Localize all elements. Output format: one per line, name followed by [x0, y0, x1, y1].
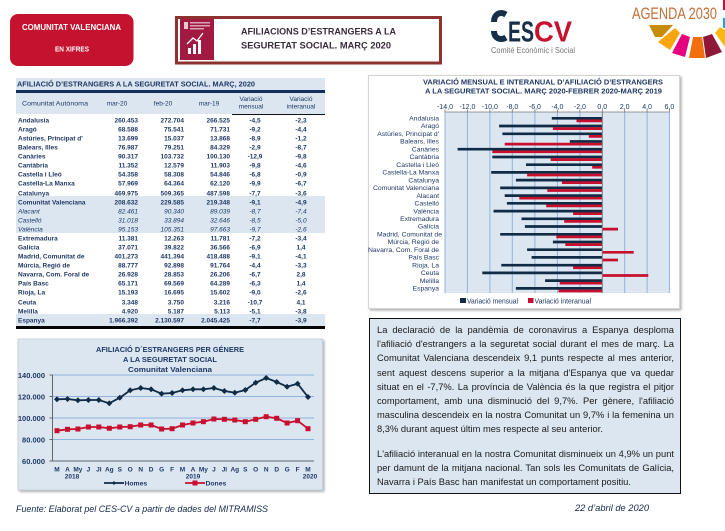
table rows: 71.731 — [210, 126, 230, 133]
table rows: 15.037 — [164, 135, 184, 142]
table rows: 97.663 — [210, 226, 230, 233]
table rows: 12.579 — [164, 162, 184, 169]
table header: mar-20 — [107, 100, 128, 108]
table rows: 11.781 — [210, 235, 230, 242]
x axis labels: Jl — [96, 466, 102, 474]
table rows: 441.394 — [160, 253, 184, 260]
table rows: Aragó — [18, 126, 37, 133]
x axis labels: M — [305, 466, 311, 474]
x axis labels: S — [243, 466, 248, 474]
table rows: 69.569 — [164, 280, 184, 287]
logo: CES CV: CV — [534, 16, 573, 48]
table rows: 64.289 — [210, 280, 230, 287]
x axis labels: O — [253, 466, 258, 474]
table rows: 487.598 — [206, 190, 230, 197]
category labels: Extremadura — [400, 216, 439, 223]
table rows: 509.365 — [160, 190, 184, 197]
y axis and gridlines — [18, 371, 314, 466]
x axis labels: G — [285, 466, 290, 474]
table rows: 11.352 — [118, 162, 138, 169]
x axis labels: My — [199, 466, 208, 474]
highlight: Comunitat Valenciana block — [16, 196, 325, 233]
table rows: -2,6 — [295, 226, 307, 233]
table rows: Castella i Lleó — [18, 171, 62, 178]
table rows: 26.928 — [118, 271, 138, 278]
title text — [241, 26, 396, 50]
table rows: -0,9 — [295, 171, 307, 178]
bars: variació mensual — [458, 118, 602, 288]
category labels: Catalunya — [408, 177, 439, 184]
table rows: 75.541 — [164, 126, 184, 133]
table rows: -2,3 — [295, 117, 307, 124]
category labels: Canàries — [412, 146, 440, 153]
logo: Agenda 2030 — [632, 0, 725, 58]
table rows: 33.894 — [164, 217, 184, 224]
text block: analysis: l'afiliació d'estrangers a la seguretat social durant el mes de març. La — [377, 339, 674, 349]
x axis labels: D — [274, 466, 279, 474]
table rows: -7,4 — [295, 208, 307, 215]
top axis labels: -14,0 — [437, 104, 453, 111]
x axis labels: O — [128, 466, 133, 474]
table rows: -3,6 — [295, 190, 307, 197]
legend: Variació mensual — [467, 298, 518, 306]
table rows: -3,8 — [295, 308, 307, 315]
table rows: -4,5 — [249, 117, 261, 124]
table header: feb-20 — [154, 100, 173, 108]
table rows: Comunitat Valenciana — [18, 199, 86, 206]
zero axis — [601, 112, 603, 293]
table rows: Rioja, La — [18, 289, 45, 296]
table rows: -3,9 — [295, 317, 307, 324]
top axis labels: -6,0 — [529, 104, 541, 111]
logo: CES CV: Comité Econòmic i Social — [491, 46, 575, 55]
table rows: Madrid, Comunitat de — [18, 253, 85, 260]
x axis labels: Ag — [105, 466, 114, 474]
category labels: Aragó — [421, 123, 439, 130]
table rows: 68.588 — [118, 126, 138, 133]
text block: analysis: situat en el -7,7%. La província de València és la que registra el pitjor — [377, 382, 674, 392]
table rows: -8,7 — [249, 208, 261, 215]
table rows: 31.018 — [118, 217, 138, 224]
table rows: Andalusia — [18, 117, 49, 124]
table header: interanual — [287, 104, 316, 110]
table header: mensual — [239, 104, 264, 110]
x axis labels: S — [118, 466, 123, 474]
category labels — [368, 116, 442, 293]
table rows: 11.381 — [118, 235, 138, 242]
table rows: 1.966.392 — [109, 317, 138, 324]
table rows: -12,9 — [248, 153, 263, 160]
table rows: 103.732 — [160, 153, 184, 160]
table rows: València — [18, 226, 43, 233]
top axis labels — [437, 104, 674, 111]
y axis and gridlines: 80.000 — [22, 436, 45, 444]
table rows: 3.750 — [168, 299, 184, 306]
table rows: Múrcia, Regió de — [18, 262, 70, 269]
table rows: -3,3 — [295, 262, 307, 269]
table rows: 88.777 — [118, 262, 138, 269]
table rows: Castelló — [18, 217, 42, 224]
table rows: Alacant — [17, 208, 41, 215]
category labels: Comunitat Valenciana — [373, 185, 439, 192]
chart title: AFILIACIÓ D´ESTRANGERS PER GÉNERE — [96, 345, 244, 354]
panel: bar chart monthly and annual variation — [368, 76, 680, 308]
table rows: 84.329 — [210, 144, 230, 151]
table rows: -5,0 — [295, 217, 307, 224]
table rows: Extremadura — [18, 235, 58, 242]
badge: Comunitat Valenciana en xifres: COMUNITAT VALENCIANA — [22, 23, 121, 32]
table rows: 65.171 — [118, 280, 138, 287]
category labels: Castelló — [414, 200, 439, 208]
table rows: 15.193 — [118, 289, 138, 296]
table header: Comunitat Autònoma — [22, 100, 88, 108]
table rows: 90.340 — [164, 208, 184, 215]
category labels: País Basc — [408, 255, 440, 262]
table rows: -10,7 — [248, 299, 263, 306]
chart title — [96, 345, 244, 374]
table rows: 100.130 — [206, 153, 230, 160]
table rows: -6,7 — [295, 180, 307, 187]
x axis labels: 2019 — [186, 474, 201, 480]
y axis and gridlines: 140.000 — [18, 371, 45, 380]
badge: Comunitat Valenciana en xifres: EN XIFRES — [55, 46, 89, 54]
x axis labels: G — [159, 466, 164, 474]
table rows: 105.351 — [160, 226, 184, 233]
category labels: Cantàbria — [410, 154, 439, 161]
category labels: Castella i Lleó — [396, 162, 439, 169]
table rows: 13.868 — [210, 135, 230, 142]
table rows: Espanya — [18, 317, 45, 324]
table rows: 12.263 — [164, 235, 184, 242]
table rows: 16.695 — [164, 289, 184, 296]
table rows: 229.585 — [160, 199, 184, 206]
text block: analysis: La declaració de la pandèmia de coronavirus a Espanya desploma — [377, 325, 674, 335]
category labels: Castella-La Manxa — [382, 170, 439, 177]
table rows: -4,9 — [295, 199, 307, 206]
table rows: 79.251 — [164, 144, 184, 151]
table rows: 1,4 — [296, 244, 306, 251]
logo: CES CV: ES — [508, 16, 534, 48]
x axis labels: F — [296, 466, 300, 474]
table rows: Melilla — [18, 308, 38, 315]
x axis labels: F — [170, 466, 174, 474]
text block: analysis: masculina descendeix en la nostra Comunitat un 9,7% i la femenina un — [377, 410, 674, 420]
category labels: Galícia — [418, 224, 439, 231]
title text: SEGURETAT SOCIAL. MARÇ 2020 — [241, 40, 391, 50]
text block: analysis: sent aquest descens superior a la mitjana d'Espanya que va quedar — [377, 368, 674, 378]
table header: Variació — [239, 96, 263, 103]
table rows: -9,0 — [249, 289, 261, 296]
table rows: -9,8 — [249, 162, 261, 169]
plot background and gridlines — [445, 110, 669, 293]
chart title: A LA SEGURETAT SOCIAL. MARÇ 2020-FEBRER 2020-MARÇ 2019 — [425, 86, 662, 96]
table header: mar-19 — [199, 100, 220, 108]
table rows: 13.699 — [118, 135, 138, 142]
table rows: 3.348 — [122, 299, 138, 306]
category labels: Andalusia — [409, 116, 439, 122]
x axis labels — [54, 466, 318, 480]
x axis labels: Ag — [230, 466, 239, 474]
table rows: País Basc — [18, 280, 49, 287]
table rows: 272.704 — [160, 117, 184, 124]
text block: analysis: Navarra i País Basc han manifestat un comportament positiu. — [377, 477, 631, 487]
date: 22 d’abril de 2020 — [574, 503, 649, 513]
badge: Comunitat Valenciana en xifres — [10, 14, 134, 66]
table rows: -4,4 — [249, 262, 261, 269]
table rows: -9,8 — [295, 153, 307, 160]
table rows: 15.602 — [210, 289, 230, 296]
text block: analysis — [369, 318, 681, 494]
table rows: 11.903 — [210, 162, 230, 169]
category labels: Navarra, Com. Foral de — [368, 247, 439, 254]
chart title: A LA SEGURETAT SOCIAL — [123, 355, 217, 364]
table rows: Cantàbria — [18, 162, 48, 169]
table rows: -9,1 — [249, 253, 261, 260]
highlight: Espanya block — [16, 314, 325, 326]
legend: Homes — [124, 480, 147, 488]
text block: analysis: Comunitat Valenciana descendeix 9,1 punts respecte al mes anterior, — [377, 353, 674, 363]
table rows: 58.308 — [164, 171, 184, 178]
table header: Variació — [289, 96, 313, 103]
table rows: Canàries — [18, 153, 46, 160]
table rows: 219.348 — [206, 199, 230, 206]
table rows: 4.920 — [122, 308, 138, 315]
table rows: 37.071 — [118, 244, 138, 251]
x axis labels: N — [264, 466, 269, 474]
table rows: 95.153 — [118, 226, 138, 233]
panel: line chart by gender — [18, 339, 322, 490]
table rows: 3.216 — [214, 299, 230, 306]
x axis labels: 2020 — [303, 474, 318, 480]
table rows: -4,6 — [295, 162, 307, 169]
table rows: 39.822 — [164, 244, 184, 251]
table rows: 418.488 — [206, 253, 230, 260]
y axis and gridlines: 60.000 — [22, 457, 45, 466]
text block: analysis: L'afiliació interanual en la nostra Comunitat disminueix un 4,9% un punt — [377, 449, 674, 459]
top axis labels: -8,0 — [506, 104, 518, 111]
top axis labels: 4,0 — [642, 104, 652, 111]
category labels: Múrcia, Regió de — [388, 239, 439, 246]
table rows: 76.987 — [118, 144, 138, 151]
category labels: Espanya — [413, 286, 439, 293]
table rows: Navarra, Com. Foral de — [18, 271, 90, 278]
legend: Variació interanual — [534, 298, 591, 306]
top axis labels: -4,0 — [551, 104, 564, 111]
table rows: 26.206 — [210, 271, 230, 278]
line: Homes — [57, 378, 308, 403]
table rows: -5,1 — [249, 308, 261, 315]
y axis and gridlines: 120.000 — [18, 392, 45, 402]
x axis labels: 2018 — [65, 474, 80, 480]
table closing bar — [16, 326, 325, 329]
table rows: -4,4 — [295, 126, 307, 133]
table rows: 5.187 — [168, 308, 184, 315]
table rows: 89.039 — [210, 208, 230, 215]
top axis labels: 2,0 — [620, 104, 630, 111]
panel: table of affiliations — [16, 78, 325, 329]
line: Dones — [57, 417, 308, 431]
chart title — [423, 78, 663, 96]
table rows: 62.120 — [210, 180, 230, 187]
table rows: 4,1 — [296, 299, 306, 306]
table rows: 2.130.597 — [155, 317, 184, 324]
table rows: Astúries, Principat d' — [18, 135, 83, 142]
text block: analysis: 8,3% durant aquest últim mes respecte al seu anterior. — [377, 424, 603, 434]
table rows: -7,7 — [249, 317, 261, 324]
category labels: Astúries, Principat d' — [377, 131, 439, 138]
y axis and gridlines: 100.000 — [18, 414, 45, 423]
table rows: 82.461 — [118, 208, 138, 215]
bars: variació interanual — [492, 121, 648, 291]
x axis labels: J — [212, 466, 216, 474]
table rows: 208.632 — [114, 199, 138, 206]
x axis labels: A — [65, 466, 70, 474]
table title — [16, 78, 325, 90]
icon: SDG 8 decent work — [180, 19, 214, 60]
table rows: -6,9 — [249, 244, 261, 251]
table rows: -7,2 — [249, 235, 261, 242]
table rows: -8,5 — [249, 217, 261, 224]
table rows: 401.273 — [114, 253, 138, 260]
table rows: 54.358 — [118, 171, 138, 178]
table header — [16, 90, 325, 115]
legend — [104, 480, 226, 488]
table rows: 92.898 — [164, 262, 184, 269]
category labels: Ceuta — [421, 270, 439, 277]
top axis labels: 6,0 — [665, 104, 674, 111]
source note: Fuente: Elaborat pel CES-CV a partir de dades del MITRAMISS — [16, 504, 268, 514]
table rows: -7,7 — [249, 190, 261, 197]
table rows: Balears, Illes — [18, 144, 58, 151]
table rows: 90.317 — [118, 153, 138, 160]
category labels: Balears, Illes — [400, 139, 440, 146]
table title: AFILIACIÓ D’ESTRANGERS A LA SEGURETAT SOCIAL. MARÇ, 2020 — [17, 80, 255, 88]
legend: Dones — [206, 480, 226, 488]
title text: AFILIACIONS D’ESTRANGERS A LA — [241, 26, 396, 36]
x axis labels: My — [73, 466, 83, 474]
table rows: 54.846 — [210, 171, 230, 178]
table rows: -8,7 — [295, 144, 307, 151]
table rows: 64.364 — [164, 180, 184, 187]
table rows: Catalunya — [18, 190, 49, 197]
table rows: 1,4 — [296, 280, 306, 287]
table rows: -9,7 — [249, 226, 261, 233]
table rows: -9,9 — [249, 180, 261, 187]
table rows — [17, 117, 307, 324]
table rows: 91.764 — [210, 262, 230, 269]
table rows: -2,9 — [249, 144, 261, 151]
x axis labels: M — [180, 466, 185, 474]
table rows: 5.113 — [214, 308, 230, 315]
top axis labels: -2,0 — [574, 104, 586, 111]
logo: CES CV — [491, 13, 575, 55]
category labels: Melilla — [420, 278, 439, 285]
table rows: -9,2 — [249, 126, 261, 133]
table rows: 469.975 — [114, 190, 138, 197]
top axis labels: 0,0 — [597, 104, 607, 111]
table rows: -2,6 — [295, 289, 307, 296]
table rows: -6,8 — [249, 171, 261, 178]
table rows: -6,3 — [249, 280, 261, 287]
top axis labels: -10,0 — [482, 104, 498, 111]
table rows: 28.853 — [164, 271, 184, 278]
table rows: Ceuta — [18, 299, 36, 306]
table rows: 57.969 — [118, 180, 138, 187]
chart title: Comunitat Valenciana — [128, 365, 213, 374]
top axis labels: -12,0 — [459, 104, 475, 111]
table rows: -6,7 — [249, 271, 261, 278]
category labels: Alacant — [416, 193, 439, 200]
table rows: -3,4 — [295, 235, 307, 242]
title box — [176, 18, 440, 63]
x axis labels: J — [87, 466, 91, 474]
category labels: València — [413, 208, 439, 215]
chart title: VARIACIÓ MENSUAL E INTERANUAL D’AFILIACIÓ D’ESTRANGERS — [423, 78, 663, 86]
category labels: Rioja, La — [412, 262, 439, 269]
x axis labels: A — [191, 466, 196, 474]
x axis labels: D — [149, 466, 154, 474]
table rows: Castella-La Manxa — [18, 180, 75, 187]
x axis labels: M — [54, 466, 60, 474]
table rows: -1,2 — [295, 135, 307, 142]
table rows: 32.646 — [210, 217, 230, 224]
category labels: Madrid, Comunitat de — [377, 232, 442, 238]
table rows: -4,1 — [295, 253, 307, 260]
table rows: -9,1 — [249, 199, 261, 206]
table rows: 266.525 — [206, 117, 230, 124]
x axis labels: Jl — [222, 466, 227, 474]
legend — [460, 298, 591, 306]
text block: analysis: comportament, amb una disminució del 9,7%. Per gènere, l'afiliació — [377, 396, 674, 406]
table rows: 2,8 — [296, 271, 306, 278]
table rows: 2.045.425 — [201, 317, 230, 324]
table rows: 260.453 — [114, 117, 138, 124]
text block: analysis: per damunt de la mitjana nacional. Tan sols les Comunitats de Galícia, — [377, 463, 674, 473]
table rows: Galícia — [18, 244, 40, 251]
table rows: 36.566 — [210, 244, 230, 251]
table rows: -8,9 — [249, 135, 261, 142]
x axis labels: N — [138, 466, 143, 474]
